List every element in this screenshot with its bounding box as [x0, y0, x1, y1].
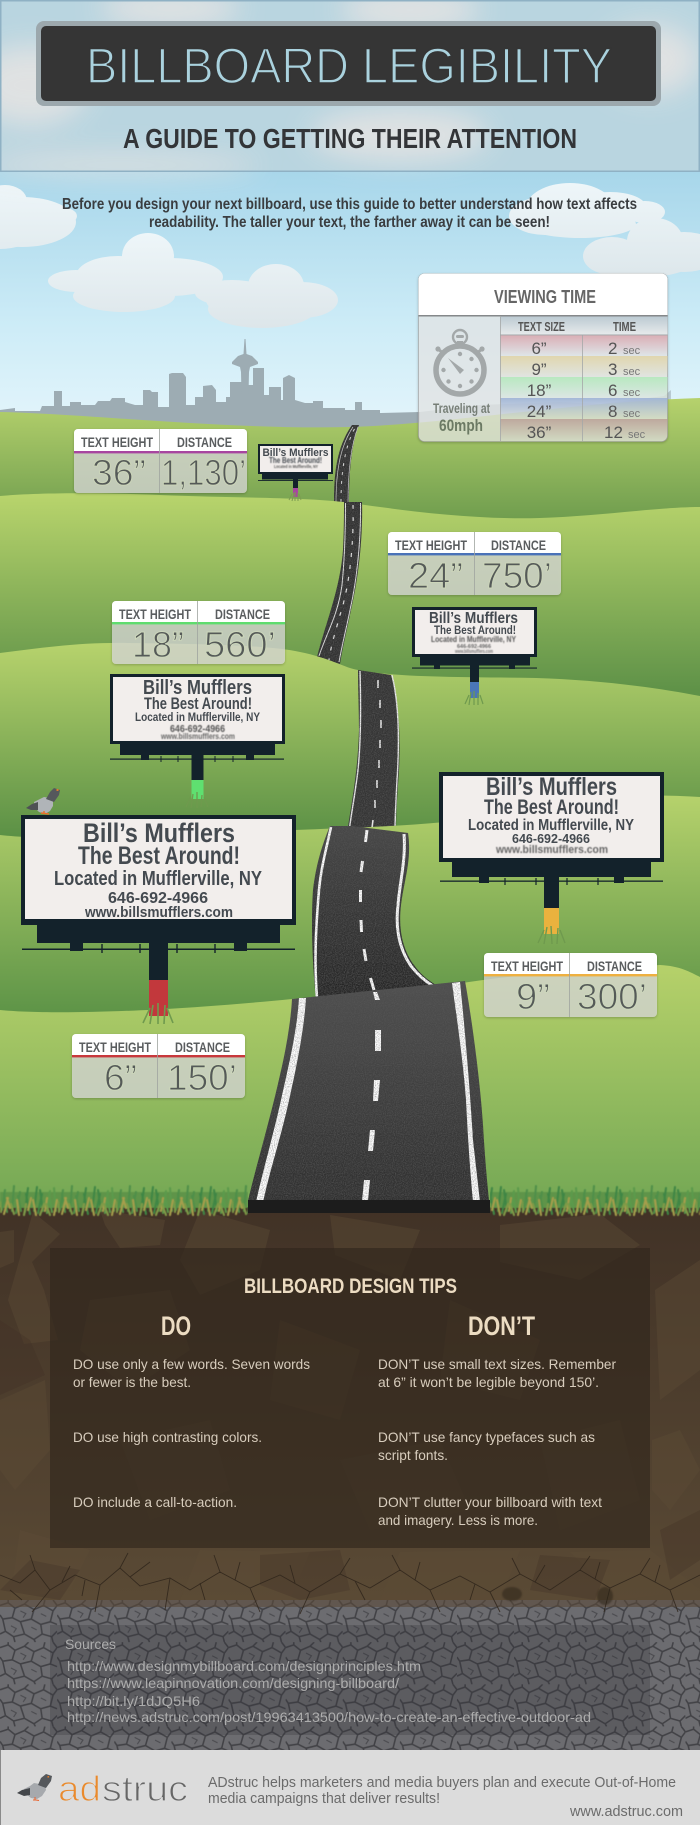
hill: far horizon [0, 398, 700, 540]
footer description: ADstruc helps marketers and media buyers plan and execute Out-of-Home [208, 1774, 676, 1791]
road: foreground segment [248, 981, 489, 1202]
header panel [0, 0, 700, 175]
footer url: www.adstruc.com [569, 1803, 683, 1820]
list: don't tips: DON’T use fancy typefaces such as [378, 1429, 595, 1445]
hill: third [0, 643, 700, 860]
billboard: 36 inch: Located in Mufflerville, NY [274, 464, 318, 469]
card: 18 inch 560 feet: TEXT HEIGHT [119, 606, 191, 622]
billboard: 9 inch: Located in Mufflerville, NY [468, 817, 634, 834]
sky background [0, 0, 700, 440]
card: 6 inch 150 feet: 150’ [167, 1057, 237, 1098]
card: 9 inch 300 feet: 9” [516, 976, 550, 1017]
list: do tips: DO use only a few words. Seven words [73, 1356, 310, 1372]
billboard: 24 inch: The Best Around! [434, 623, 516, 637]
sources list: https://www.leapinnovation.com/designing-billboard/ [67, 1675, 399, 1691]
title sign [36, 21, 661, 106]
billboard: 36 inch: The Best Around! [269, 456, 322, 465]
table: viewing time: 24” [527, 402, 552, 421]
billboard: 6 inch [21, 815, 296, 1024]
card: 36 inch 1,130 feet: 1,130’ [161, 452, 246, 493]
subtitle: A GUIDE TO GETTING THEIR ATTENTION [123, 123, 577, 154]
card: 24 inch 750 feet: TEXT HEIGHT [395, 537, 467, 553]
soil dark stains [502, 1587, 613, 1605]
card: 6 inch 150 feet [72, 1034, 245, 1098]
icon: footer pigeon [17, 1774, 52, 1800]
list: do tips: or fewer is the best. [73, 1374, 191, 1390]
sources list: http://www.designmybillboard.com/designprinciples.htm [67, 1658, 421, 1674]
panel: viewing time [418, 274, 668, 442]
logo: adstruc [58, 1768, 188, 1809]
icon: pigeon on billboard [26, 788, 60, 814]
card: 24 inch 750 feet: DISTANCE [491, 537, 546, 553]
list: don't tips: DON’T clutter your billboard with text [378, 1494, 602, 1510]
cloud: far left [0, 185, 77, 249]
list: do tips [73, 1356, 310, 1510]
card: 9 inch 300 feet: DISTANCE [587, 958, 642, 974]
table: viewing time: 6” [531, 339, 547, 358]
billboard: 6 inch: 646-692-4966 [108, 890, 208, 907]
label: traveling at 60mph [433, 400, 490, 435]
logo: adstruc: ad [58, 1768, 101, 1809]
hill: foreground [0, 965, 700, 1215]
footer [0, 1750, 700, 1825]
billboard: 18 inch: 646-692-4966 [170, 724, 225, 735]
heading: don't: DON’T [468, 1311, 535, 1341]
table: viewing time: 6 [608, 381, 617, 400]
intro text [62, 196, 637, 231]
table: viewing time: 12 [604, 423, 623, 442]
road: far segment [334, 425, 359, 503]
soil ground [0, 1207, 700, 1600]
table: viewing time: sec [623, 345, 641, 357]
card: 9 inch 300 feet [484, 953, 657, 1017]
list: do tips: DO include a call-to-action. [73, 1494, 237, 1510]
billboard: 6 inch: Bill’s Mufflers [83, 818, 235, 848]
card: 9 inch 300 feet: 300’ [577, 976, 647, 1017]
grass shading right [490, 1192, 700, 1208]
billboard: 6 inch: The Best Around! [78, 842, 240, 870]
billboard: 36 inch [258, 444, 333, 501]
billboard: 9 inch: 646-692-4966 [512, 831, 590, 846]
billboard: 18 inch: Bill’s Mufflers [143, 677, 252, 699]
billboard: 18 inch: www.billsmufflers.com [160, 732, 235, 741]
sources list: http://bit.ly/1dJQ5H6 [67, 1693, 200, 1709]
table: viewing time: TIME [613, 320, 636, 334]
table: viewing time: sec [623, 366, 641, 378]
label: traveling at 60mph: Traveling at [433, 400, 490, 416]
road: third segment [347, 670, 400, 835]
card: 24 inch 750 feet [388, 532, 561, 596]
logo: adstruc: struc [102, 1768, 188, 1809]
table: viewing time: sec [628, 429, 646, 441]
billboard: 24 inch: Located in Mufflerville, NY [431, 634, 516, 644]
panel: billboard design tips [50, 1248, 650, 1548]
table: viewing time [500, 316, 668, 442]
cloud: centre left [48, 233, 223, 312]
table: viewing time: sec [623, 387, 641, 399]
billboard: 24 inch: 646-692-4966 [457, 644, 491, 650]
billboard: 24 inch: Bill’s Mufflers [429, 610, 518, 627]
card: 6 inch 150 feet: DISTANCE [175, 1039, 230, 1055]
billboard: 18 inch: The Best Around! [144, 694, 252, 713]
card: 9 inch 300 feet: TEXT HEIGHT [491, 958, 563, 974]
city skyline [0, 339, 671, 432]
billboard: 9 inch [439, 772, 664, 944]
billboard: 18 inch: Located in Mufflerville, NY [135, 710, 260, 724]
grass shading [0, 1192, 248, 1208]
grass edge right [490, 1178, 700, 1216]
list: don't tips [378, 1356, 616, 1528]
card: 18 inch 560 feet: 18” [132, 624, 184, 665]
table: viewing time: 3 [608, 360, 617, 379]
table: viewing time: TEXT SIZE [518, 320, 565, 334]
list: don't tips: and imagery. Less is more. [378, 1512, 538, 1528]
billboard: 6 inch: Located in Mufflerville, NY [54, 868, 263, 890]
card: 24 inch 750 feet: 750’ [482, 555, 552, 596]
card: 6 inch 150 feet: 6” [104, 1057, 137, 1098]
table: viewing time: 2 [608, 339, 617, 358]
road: fourth segment [312, 826, 436, 1010]
card: 24 inch 750 feet: 24” [408, 555, 463, 596]
list: don't tips: script fonts. [378, 1447, 448, 1463]
footer description [208, 1774, 676, 1807]
card: 18 inch 560 feet: DISTANCE [215, 606, 270, 622]
heading: billboard design tips: BILLBOARD DESIGN TIPS [244, 1275, 457, 1298]
billboard: 24 inch [412, 607, 537, 705]
list: don't tips: at 6” it won’t be legible beyond 150’. [378, 1374, 599, 1390]
soil cracks [0, 1553, 700, 1614]
footer description: media campaigns that deliver results! [208, 1790, 440, 1807]
card: 18 inch 560 feet: 560’ [204, 624, 276, 665]
grass edge [0, 1178, 248, 1216]
label: traveling at 60mph: 60mph [439, 416, 483, 435]
stone bedrock [0, 1600, 700, 1750]
intro text: readability. The taller your text, the farther away it can be seen! [149, 214, 550, 231]
list: do tips: DO use high contrasting colors. [73, 1429, 262, 1445]
billboard: 9 inch: The Best Around! [484, 796, 619, 819]
cloud: centre [195, 264, 338, 328]
hill: fourth [0, 796, 700, 1030]
icon: stopwatch [435, 330, 485, 394]
card: 36 inch 1,130 feet: DISTANCE [177, 434, 232, 450]
sources heading: Sources [65, 1636, 116, 1652]
table: viewing time: 9” [531, 360, 547, 379]
billboard: 6 inch: www.billsmufflers.com [84, 904, 233, 921]
sources list: http://news.adstruc.com/post/19963413500/how-to-create-an-effective-outdoor-ad [67, 1709, 591, 1725]
billboard: 18 inch [110, 674, 285, 808]
card: 36 inch 1,130 feet: TEXT HEIGHT [81, 434, 153, 450]
card: 36 inch 1,130 feet [74, 429, 247, 493]
billboard: 36 inch: Bill’s Mufflers [262, 447, 328, 459]
title: BILLBOARD LEGIBILITY [86, 38, 612, 94]
table: viewing time: 8 [608, 402, 617, 421]
panel: sources [50, 1625, 650, 1735]
table: viewing time: sec [623, 408, 641, 420]
hill: second [0, 493, 700, 720]
heading: viewing time: VIEWING TIME [494, 287, 596, 307]
list: don't tips: DON’T use small text sizes. Remember [378, 1356, 616, 1372]
card: 18 inch 560 feet [112, 601, 285, 665]
heading: do: DO [161, 1311, 191, 1341]
card: 6 inch 150 feet: TEXT HEIGHT [79, 1039, 151, 1055]
billboard: 9 inch: www.billsmufflers.com [495, 844, 608, 856]
cloud: upper right [509, 183, 665, 238]
card: 36 inch 1,130 feet: 36” [92, 452, 146, 493]
table: viewing time: 18” [527, 381, 552, 400]
sources list [67, 1658, 591, 1725]
road: second segment [317, 502, 362, 664]
billboard: 9 inch: Bill’s Mufflers [486, 773, 617, 801]
table: viewing time: 36” [527, 423, 552, 442]
billboard: 24 inch: www.billsmufflers.com [454, 649, 493, 655]
road base edge [248, 1200, 490, 1213]
cloud: right edge [583, 218, 700, 277]
